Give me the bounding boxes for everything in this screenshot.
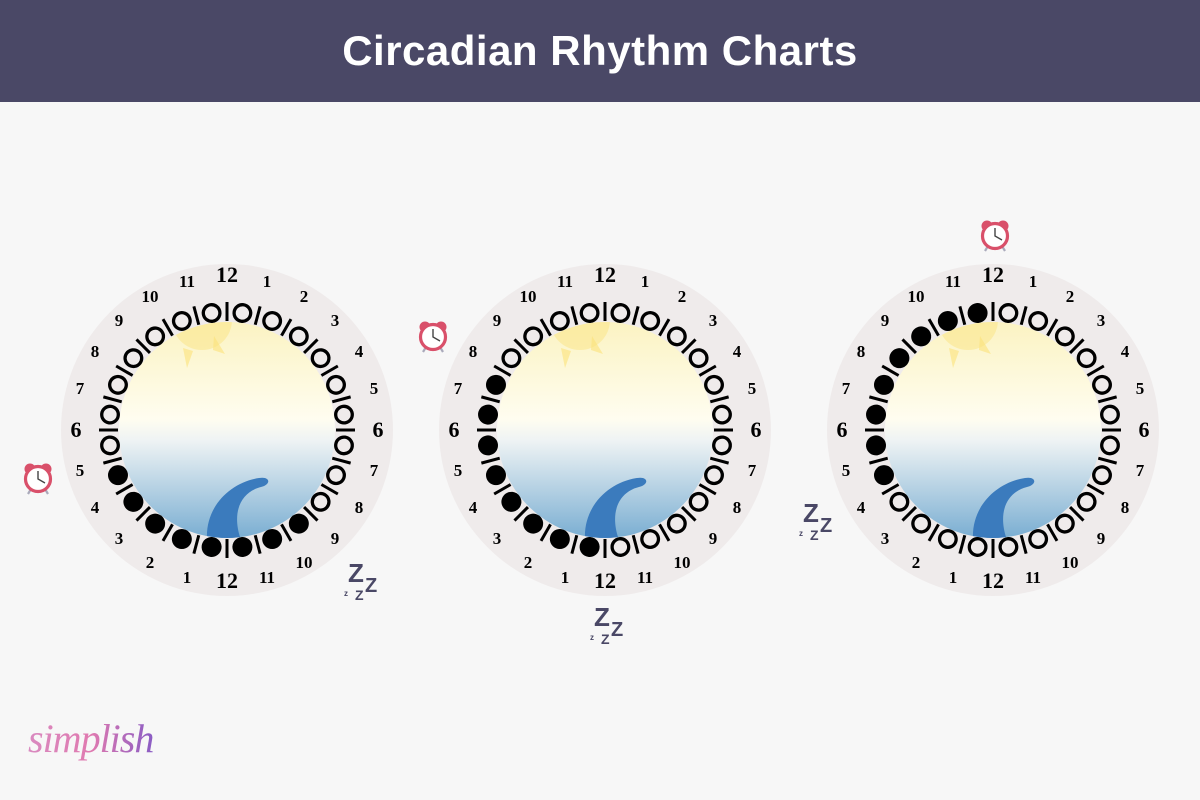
hour numbers clock 1: 10: [142, 287, 158, 306]
hour numbers clock 2: 2: [524, 553, 532, 572]
hour numbers clock 2: 8: [733, 498, 741, 517]
icon: zzz 2: Z: [601, 631, 610, 647]
hour numbers clock 1: 1: [183, 568, 191, 587]
hour numbers clock 2: 4: [469, 498, 478, 517]
hour numbers clock 1: 11: [259, 568, 275, 587]
hour numbers clock 1: 12: [216, 568, 238, 593]
hour numbers clock 1: 3: [115, 529, 123, 548]
hour numbers clock 1: 7: [370, 461, 379, 480]
hour numbers clock 3: 9: [1097, 529, 1105, 548]
hour numbers clock 1: 7: [76, 379, 85, 398]
markers clock 1: [101, 304, 353, 558]
hour numbers clock 1: 1: [263, 272, 271, 291]
hour numbers clock 2: 11: [637, 568, 653, 587]
hour numbers clock 3: 3: [1097, 311, 1105, 330]
icon: zzz 3: [799, 498, 832, 543]
icon: zzz 2: Z: [594, 602, 610, 632]
hour numbers clock 3: 2: [1066, 287, 1074, 306]
hour numbers clock 3: 7: [1136, 461, 1145, 480]
icon: zzz 1: [344, 558, 377, 603]
icon: zzz 2: [590, 602, 623, 647]
hour numbers clock 2: 11: [557, 272, 573, 291]
hour numbers clock 1: 4: [355, 342, 364, 361]
hour numbers clock 3: 1: [949, 568, 957, 587]
hour numbers clock 2: 10: [674, 553, 690, 572]
hour numbers clock 2: 4: [733, 342, 742, 361]
hour numbers clock 1: 5: [76, 461, 84, 480]
icon: alarm clock 2: [420, 322, 446, 352]
icon: zzz 1: Z: [365, 575, 377, 597]
hour numbers clock 3: 7: [842, 379, 851, 398]
hour numbers clock 1: 9: [331, 529, 339, 548]
hour numbers clock 3: 11: [1025, 568, 1041, 587]
hour numbers clock 1: 10: [296, 553, 312, 572]
hour numbers clock 1: 6: [70, 417, 82, 442]
hour numbers clock 2: 12: [594, 262, 616, 287]
hour numbers clock 2: 5: [454, 461, 462, 480]
hour numbers clock 3: 6: [836, 417, 848, 442]
clock 2: [439, 262, 771, 596]
hour numbers clock 3: 11: [945, 272, 961, 291]
hour numbers clock 2: 6: [750, 417, 762, 442]
header bar: [0, 0, 1200, 102]
icon: alarm clock 3: [982, 220, 1008, 251]
hour numbers clock 3: 8: [1121, 498, 1129, 517]
hour numbers clock 2: 1: [561, 568, 569, 587]
icon: zzz 1: z: [344, 589, 348, 598]
hour numbers clock 2: 1: [641, 272, 649, 291]
title: Circadian Rhythm Charts: [342, 27, 858, 74]
clock 3: [827, 262, 1159, 596]
icon: zzz 2: z: [590, 633, 594, 642]
hour numbers clock 3: 8: [857, 342, 865, 361]
hour numbers clock 3: 2: [912, 553, 920, 572]
hour numbers clock 1: 6: [372, 417, 384, 442]
hour numbers clock 2: 3: [709, 311, 717, 330]
hour numbers clock 3: 6: [1138, 417, 1150, 442]
hour numbers clock 1: 9: [115, 311, 123, 330]
hour numbers clock 2: 10: [520, 287, 536, 306]
hour numbers clock 2: 3: [493, 529, 501, 548]
icon: alarm clock 1: [24, 464, 52, 494]
logo: simplish: simplish: [28, 716, 153, 761]
hour numbers clock 3: 12: [982, 568, 1004, 593]
icon: zzz 2: Z: [611, 619, 623, 641]
hour numbers clock 2: 7: [748, 461, 757, 480]
hour numbers clock 3: 10: [908, 287, 924, 306]
icon: zzz 3: Z: [820, 515, 832, 537]
hour numbers clock 1: 4: [91, 498, 100, 517]
hour numbers clock 2: 12: [594, 568, 616, 593]
clock 1: [61, 262, 393, 596]
hour numbers clock 1: 2: [146, 553, 154, 572]
hour numbers clock 3: 10: [1062, 553, 1078, 572]
hour numbers clock 3: [836, 262, 1150, 593]
icon: zzz 3: z: [799, 529, 803, 538]
hour numbers clock 2: 6: [448, 417, 460, 442]
hour numbers clock 3: 5: [1136, 379, 1144, 398]
hour numbers clock 2: 2: [678, 287, 686, 306]
icon: zzz 1: Z: [348, 558, 364, 588]
markers clock 3: [865, 302, 1119, 556]
hour numbers clock 3: 5: [842, 461, 850, 480]
hour numbers clock 3: 3: [881, 529, 889, 548]
hour numbers clock 1: 5: [370, 379, 378, 398]
hour numbers clock 2: 8: [469, 342, 477, 361]
icon: zzz 3: Z: [810, 527, 819, 543]
hour numbers clock 1: 3: [331, 311, 339, 330]
hour numbers clock 3: 4: [1121, 342, 1130, 361]
hour numbers clock 2: 9: [493, 311, 501, 330]
hour numbers clock 1: [70, 262, 384, 593]
hour numbers clock 2: [448, 262, 762, 593]
hour numbers clock 2: 5: [748, 379, 756, 398]
hour numbers clock 2: 7: [454, 379, 463, 398]
hour numbers clock 3: 1: [1029, 272, 1037, 291]
icon: zzz 1: Z: [355, 587, 364, 603]
hour numbers clock 1: 8: [355, 498, 363, 517]
hour numbers clock 3: 4: [857, 498, 866, 517]
hour numbers clock 1: 11: [179, 272, 195, 291]
hour numbers clock 1: 12: [216, 262, 238, 287]
icon: zzz 3: Z: [803, 498, 819, 528]
markers clock 2: [477, 304, 731, 558]
hour numbers clock 2: 9: [709, 529, 717, 548]
hour numbers clock 1: 2: [300, 287, 308, 306]
hour numbers clock 1: 8: [91, 342, 99, 361]
hour numbers clock 3: 9: [881, 311, 889, 330]
hour numbers clock 3: 12: [982, 262, 1004, 287]
